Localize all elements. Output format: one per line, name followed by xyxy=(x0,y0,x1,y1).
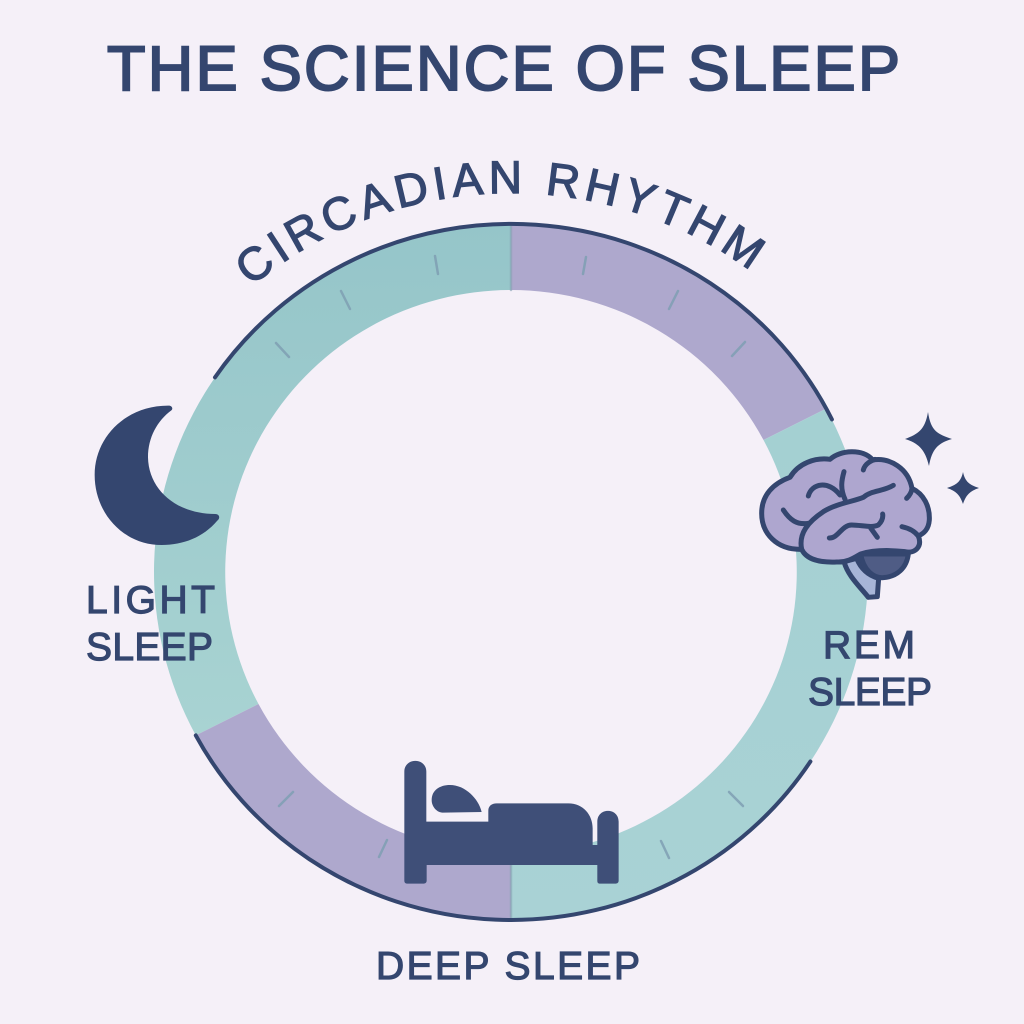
ring tick marks xyxy=(276,226,745,920)
ring segment: lower left purple xyxy=(196,704,511,920)
label: rem sleep: REM xyxy=(823,624,915,667)
label: light sleep xyxy=(86,579,215,669)
icon: large sparkle xyxy=(905,412,952,466)
label: deep sleep: DEEP SLEEP xyxy=(376,945,640,988)
circular sleep cycle ring xyxy=(154,224,868,920)
cerebellum xyxy=(861,554,908,578)
label: rem sleep xyxy=(808,624,932,714)
pillow xyxy=(432,785,482,813)
ring outline: top arc xyxy=(215,224,832,419)
ring segment: upper right purple xyxy=(511,224,826,440)
label: light sleep: LIGHT xyxy=(86,579,215,622)
ring segment: upper left teal xyxy=(154,224,511,735)
title: THE SCIENCE OF SLEEP xyxy=(107,34,900,104)
ring outline: bottom arc xyxy=(196,735,810,920)
cerebrum xyxy=(762,452,929,562)
ring segment: lower right teal xyxy=(511,409,868,920)
icon: bed with sleeper xyxy=(404,761,619,884)
icon: brain xyxy=(762,452,929,597)
brain stem xyxy=(844,558,879,597)
label: light sleep: SLEEP xyxy=(86,626,213,669)
curved heading: circadian rhythm: CIRCADIAN RHYTHM xyxy=(238,160,766,280)
icon: small sparkle xyxy=(947,472,979,504)
brain folds xyxy=(783,459,918,549)
icon: crescent moon xyxy=(95,406,219,545)
label: rem sleep: SLEEP xyxy=(808,671,932,714)
